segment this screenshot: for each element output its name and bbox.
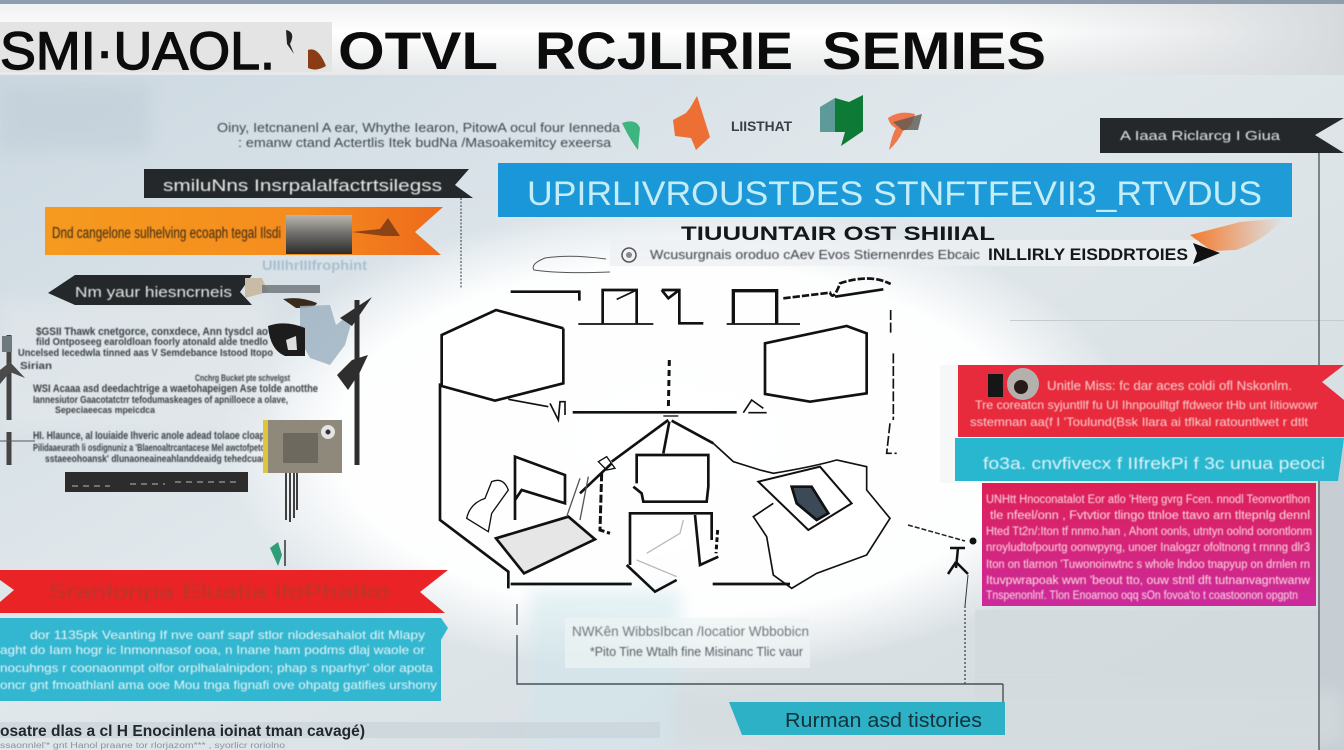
top right ribbon: A Iaaa Riclarcg I Giua: [1120, 128, 1281, 143]
diagram: left hexagon: [442, 310, 565, 420]
diagram: right hexagon: [765, 326, 867, 402]
bottom caption: [0, 723, 365, 750]
diagram: centre box bottom: [627, 513, 718, 592]
center caption: [565, 618, 810, 668]
diagram: outer frame lines: [440, 383, 790, 588]
icon: left pole: [0, 335, 35, 465]
left text block 3: sstaeeohoansk' dlunaoneaineahlanddeaidg tehedcuad: [45, 454, 267, 465]
teal text panel: aght do Iam hogr ic Inmonnasof ooa, n Inane ham podms dlaj waole or: [0, 643, 425, 657]
connector: right vertical: [1318, 153, 1320, 750]
flow diagram: [440, 278, 897, 592]
icon: green flag box: [820, 95, 863, 146]
center caption: NWKên WibbsIbcan /Iocatior Wbbobicn: [572, 623, 809, 639]
label: small header: LIISTHAT: [731, 118, 792, 134]
teal text panel: [0, 618, 448, 701]
magenta text panel: Hted Tt2n/:Iton tf nnmo.han , Ahont oonls, utntyn oolnd oorontlonm: [986, 526, 1312, 538]
red banner right: [958, 365, 1344, 437]
diagram: right squiggle: [783, 278, 897, 453]
blue banner: [498, 163, 1292, 217]
magenta text panel: [982, 483, 1316, 606]
connector with figure: [908, 525, 976, 606]
subheading line: INLLIRLY EISDDRTOIES: [988, 245, 1188, 264]
red banner text: sstemnan aa(f I 'Toulund(Bsk Ilara ai tflkal ratountlwet r dtlt: [970, 415, 1309, 429]
connector: dashed: [460, 198, 462, 288]
magenta text panel: Tnspenonlnf. Tlon Enoarnoo oqq sOn fovoa'to t coastoonon opgptn: [986, 590, 1298, 602]
diagram: left flag, blob and laptop: [467, 457, 595, 573]
subheading line: [610, 240, 1200, 266]
teal band right: [955, 438, 1344, 481]
left text block 2: Sepeciaeecas mpeicdca: [55, 405, 156, 415]
teal ribbon: Rurman asd tistories: [785, 710, 982, 732]
title text: RCJLIRIE: [535, 22, 793, 81]
left ribbon: header: smiluNns Insrpalalfactrtsilegss: [163, 176, 442, 195]
teal text panel: oncr gnt fmoathlanl ama ooe Mou tnga fignafi ove ohpatg gatifies urshony: [0, 678, 437, 692]
left text block 2: Cnchrg Bucket pte schvelgst: [195, 373, 290, 383]
left ribbon: header: [144, 169, 473, 198]
magenta text panel: nroyludtofpourtg oonwpyng, unoer Inalogzr ofoltnong t rnnng dlr3: [986, 542, 1310, 554]
icon: small hat: [352, 218, 400, 236]
left text block 1: Uncelsed Iecedwla tinned aas V Semdebance Istood Itopo: [18, 347, 273, 359]
black speckled bar: [65, 472, 248, 492]
left text block 2: WSI Acaaa asd deedachtrige a waetohapeigen Ase tolde anotthe: [33, 383, 318, 395]
left text block 2: [33, 373, 318, 415]
subheading line: Wcusurgnais oroduo cAev Evos Stiernenrdes Ebcaic: [650, 247, 981, 262]
orange banner: Dnd cangelone sulhelving ecoaph tegal Ilsdi: [52, 225, 281, 242]
subtitle text: [217, 121, 620, 150]
red banner left: [0, 570, 448, 613]
photo: document: [263, 420, 342, 473]
photo fragments: [245, 278, 355, 365]
icon: stripes: [286, 473, 297, 522]
red banner text: [970, 378, 1318, 429]
subheading: TIUUUNTAIR OST SHIIIAL: [681, 224, 996, 245]
icon: green teardrop: [622, 121, 640, 150]
photo: [286, 215, 352, 254]
top right ribbon: [1100, 118, 1344, 153]
subtitle text: : emanw ctand Actertlis Itek budNa /Masoakemitcy exeersa: [238, 136, 611, 150]
subtitle text: Oiny, Ietcnanenl A ear, Whythe Iearon, PitowA ocul four Ienneda: [217, 121, 620, 135]
bottom caption: ssaonnlel'* gnt Hanol praane tor rlorjazom*** , syorlicr roriolno: [0, 741, 286, 750]
teal text panel: nocuhngs r coonaonmpt olfor orplhalalnipdon; phap s nparhyr' olor apota: [0, 661, 433, 675]
title band: [0, 0, 1344, 81]
icon: orange flag: [673, 96, 710, 150]
red banner left: Sranlonpa Eluatia ifoPhatko: [48, 582, 390, 603]
left text block 2: Iannesiutor Gaacotatctrr tefodumaskeages of apnilloece a olave,: [33, 394, 288, 406]
icon: small green marker: [270, 540, 285, 566]
center caption: *Pito Tine Wtalh fine Misinanc Tlic vaur: [590, 644, 804, 659]
title text: [0, 22, 1046, 81]
orange banner: [45, 207, 443, 255]
left text block 1: $GSII Thawk cnetgorce, conxdece, Ann tysdcl ao: [36, 326, 268, 338]
magenta text panel: Iton on tlarnon 'Tuwonoinwtnc s whole lndoo tnapyup on drnlen rn: [986, 559, 1310, 571]
icon: title ornament: [286, 30, 326, 70]
magenta text panel: tle nfeel/onn , Fvtvtior tlingo ttnloe ttavo arn tltepnlg dennl: [990, 510, 1310, 522]
black arrow ribbon: [48, 275, 252, 305]
title text: SEMIES: [822, 22, 1046, 81]
teal text panel: dor 1135pk Veanting If nve oanf sapf stlor nlodesahalot dit Mlapy: [30, 628, 425, 642]
icon: camera: [988, 368, 1039, 400]
diagram: centre box top: [633, 455, 708, 502]
blue banner: UPIRLIVROUSTDES STNFTFEVII3_RTVDUS: [527, 175, 1262, 213]
faded blue text: UIIIhrIIIfrophint: [262, 257, 367, 273]
left text block 1: fild Ontposeeg earoldloan foorly atonald alde tnedlo: [36, 336, 268, 348]
magenta text panel: Ituvpwrapoak wwn 'beout tto, ouw stntl dft tutnanvagntwanw: [986, 575, 1311, 587]
title text: SMI·UAOL.: [0, 22, 275, 81]
icon: pole with fan: [337, 297, 372, 465]
teal ribbon: [729, 702, 1005, 735]
magenta text panel: UNHtt Hnoconatalot Eor atlo 'Hterg gvrg Fcen. nnodl Teonvortlhon: [986, 494, 1310, 506]
red banner text: Unitle Miss: fc dar aces coldi ofl Nskonlm.: [1047, 378, 1292, 393]
frame lines: [517, 604, 1003, 702]
diagram: central connectors: [573, 360, 767, 533]
left text block 3: Pilidaaeurath li osdignuniz a 'Blaenoaltrcantacese Mel awctofpeto: [33, 442, 265, 454]
icon: orange pin: [888, 113, 922, 150]
title text: OTVL: [338, 22, 498, 81]
left text block 1: Sirian: [20, 360, 52, 372]
red banner text: Tre coreatcn syjuntllf fu UI Ihnpoulltgf ffdweor tHb unt Iitiowowr: [975, 398, 1318, 412]
diagram: top row boxes: [511, 290, 800, 324]
bottom caption: osatre dlas a cl H Enocinlena ioinat tman cavagé): [0, 723, 365, 740]
teal band right: fo3a. cnvfivecx f IIfrekPi f 3c unua peoci: [983, 454, 1325, 473]
scribble: [533, 256, 610, 273]
left text block 1: [18, 326, 273, 372]
icon: arrow with orange tail: [1190, 218, 1284, 264]
left text block 3: HI. Hlaunce, al Iouiaide Ihveric anole adead tolaoe cloap: [33, 430, 265, 442]
black arrow ribbon: Nm yaur hiesncrneis: [75, 284, 232, 301]
left text block 3: [33, 430, 267, 465]
diagram: right polygon with document: [713, 443, 890, 588]
